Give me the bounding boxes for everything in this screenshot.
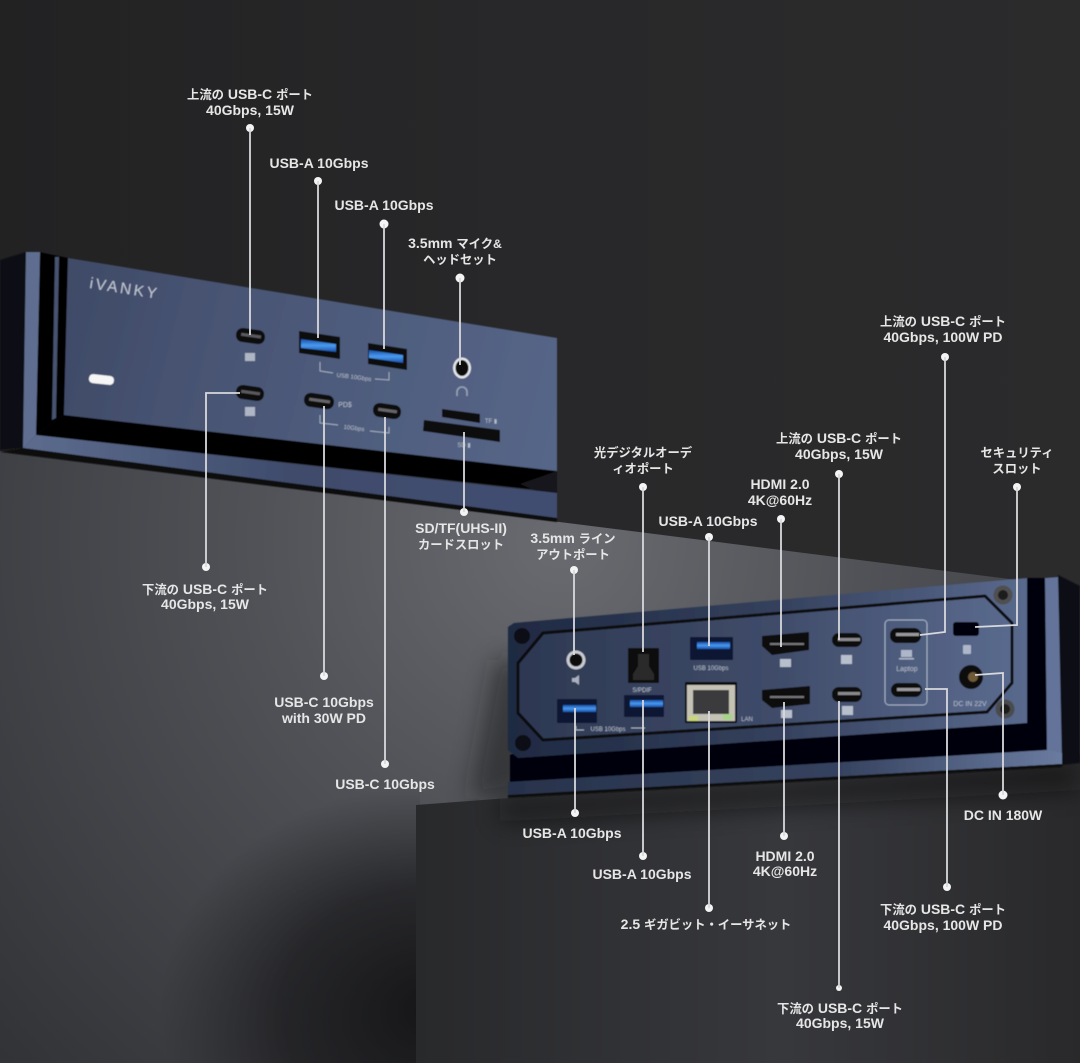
laptop ports group xyxy=(885,620,927,705)
downstream USB-C port xyxy=(891,683,922,697)
callout: mic headset: ヘッドセット xyxy=(423,253,497,267)
callout: DC IN: DC IN 180W xyxy=(964,807,1043,823)
DC IN 22V label: DC IN 22V xyxy=(953,701,987,708)
10Gbps bracket: 10Gbps xyxy=(343,425,365,433)
screw top right xyxy=(994,586,1012,604)
right dock body xyxy=(508,575,1080,798)
callout: ethernet: 2.5 ギガビット・イーサネット xyxy=(621,916,791,932)
3.5mm line-out jack xyxy=(566,650,586,670)
USB 10Gbps bracket xyxy=(320,362,389,383)
lower USB-C port xyxy=(235,384,265,402)
callout: optical audio: ィオポート xyxy=(612,461,674,476)
callout: upstream USB-C 100W: 上流の USB-C ポート xyxy=(880,313,1006,329)
icon: monitor upper xyxy=(245,353,255,361)
TF card slot xyxy=(442,409,497,425)
screw top left xyxy=(514,628,530,644)
USB-A port 2 xyxy=(368,343,407,370)
callout: HDMI bottom xyxy=(753,702,817,879)
optical S/PDIF port xyxy=(628,648,659,694)
callout: upstream USB-C rear: 40Gbps, 15W xyxy=(795,446,884,462)
callout: USB-C 10Gbps xyxy=(335,417,435,792)
left dock body xyxy=(0,252,557,522)
background: grey lower wall xyxy=(0,451,1080,1063)
left dock: front view xyxy=(0,252,557,522)
callout: downstream USB-C front: 下流の USB-C ポート xyxy=(142,581,268,597)
callout: downstream USB-C 100W: 40Gbps, 100W PD xyxy=(883,917,1003,933)
USB-C port 3 xyxy=(372,402,402,420)
callout: USB-A rear top xyxy=(658,513,758,646)
USB 10Gbps bracket xyxy=(576,726,645,733)
LAN port: LAN xyxy=(741,717,753,723)
screw bottom right xyxy=(996,700,1014,718)
icon: lock xyxy=(963,645,971,654)
callout: HDMI top xyxy=(748,476,812,647)
callout: HDMI top: HDMI 2.0 xyxy=(750,476,810,492)
background: front pedestal block xyxy=(416,755,1080,1063)
callout: downstream USB-C rear: 下流の USB-C ポート xyxy=(777,1000,903,1016)
security slot xyxy=(953,622,979,636)
callout: USB-A rear middle xyxy=(592,700,692,882)
callout: SD/TF slot: SD/TF(UHS-II) xyxy=(415,520,507,536)
callout: optical audio xyxy=(594,445,693,652)
callout: HDMI bottom: 4K@60Hz xyxy=(753,863,817,879)
callout: USB-A front 2 xyxy=(334,197,434,349)
audio jack xyxy=(453,358,471,378)
callout: downstream USB-C rear xyxy=(777,701,903,1031)
DC input xyxy=(959,665,983,689)
callout: USB-A rear left xyxy=(522,708,622,841)
callout: DC IN xyxy=(964,673,1043,823)
callout: USB-C 30W PD xyxy=(274,406,374,726)
USB-A top port: USB 10Gbps xyxy=(693,666,729,672)
optical S/PDIF port: S/PDIF xyxy=(632,688,652,694)
icon: monitor lower xyxy=(245,407,255,416)
icon: speaker xyxy=(572,675,579,685)
icon: 4K top xyxy=(780,659,791,667)
TF card slot: TF ▮ xyxy=(485,419,497,425)
callout: security slot: スロット xyxy=(992,462,1042,476)
10Gbps bracket xyxy=(320,415,389,433)
callout: downstream USB-C front: 40Gbps, 15W xyxy=(161,596,250,612)
callout: upstream USB-C rear xyxy=(776,430,902,640)
SD card slot xyxy=(423,420,500,449)
callout: USB-A front 2: USB-A 10Gbps xyxy=(334,197,434,213)
callout: SD/TF slot: カードスロット xyxy=(418,538,504,552)
icon: 4K USB-C bottom xyxy=(842,706,853,715)
callout: mic headset: 3.5mm マイク& xyxy=(408,235,502,251)
callout: SD/TF slot xyxy=(415,432,507,552)
callout: line-out xyxy=(530,530,616,655)
callout: ethernet xyxy=(621,711,791,932)
LAN port xyxy=(685,682,753,723)
callout: USB-A front 1: USB-A 10Gbps xyxy=(269,155,369,171)
USB 10Gbps bracket: USB 10Gbps xyxy=(336,373,372,383)
callout: USB-C 30W PD: USB-C 10Gbps xyxy=(274,694,374,710)
indicator light xyxy=(89,374,114,385)
screw bottom left xyxy=(515,735,531,751)
right dock: rear view xyxy=(508,575,1080,798)
logo: iVANKY: iVANKY xyxy=(88,275,161,303)
USB-A middle port xyxy=(624,695,664,717)
USB 10Gbps bracket: USB 10Gbps xyxy=(590,727,626,733)
USB-C PD port xyxy=(303,392,335,410)
callout: downstream USB-C 100W: 下流の USB-C ポート xyxy=(880,901,1006,917)
HDMI bottom port xyxy=(762,686,810,708)
callout: upstream USB-C 100W xyxy=(880,313,1006,635)
USB-C top port xyxy=(832,633,862,647)
upper USB-C port xyxy=(235,327,266,345)
callout: upstream USB-C front xyxy=(187,86,313,335)
callout: downstream USB-C front xyxy=(142,393,268,612)
USB-A top port xyxy=(690,637,733,672)
callout: downstream USB-C rear: 40Gbps, 15W xyxy=(796,1015,885,1031)
callout: USB-A front 1 xyxy=(269,155,369,338)
USB-A left port xyxy=(557,699,597,723)
icon: laptop xyxy=(899,650,914,660)
Laptop label: Laptop xyxy=(896,666,918,673)
callout: optical audio: 光デジタルオーデ xyxy=(594,445,693,460)
icon: 4K USB-C top xyxy=(841,655,852,664)
callout: mic headset xyxy=(408,235,502,365)
callout: HDMI bottom: HDMI 2.0 xyxy=(755,848,815,864)
callout: upstream USB-C front: 40Gbps, 15W xyxy=(206,102,295,118)
callout: upstream USB-C front: 上流の USB-C ポート xyxy=(187,86,313,102)
callout: security slot: セキュリティ xyxy=(980,446,1054,460)
USB-A port 1 xyxy=(299,331,340,359)
callout: USB-A rear middle: USB-A 10Gbps xyxy=(592,866,692,882)
upstream USB-C port xyxy=(890,628,921,643)
callout: line-out: アウトポート xyxy=(536,547,610,562)
icon: 4K bottom xyxy=(781,710,792,718)
PD label: PD$ xyxy=(338,402,352,409)
callout: USB-A rear top: USB-A 10Gbps xyxy=(658,513,758,529)
callout: USB-C 30W PD: with 30W PD xyxy=(281,710,366,726)
callout: upstream USB-C rear: 上流の USB-C ポート xyxy=(776,430,902,446)
callout: HDMI top: 4K@60Hz xyxy=(748,492,812,508)
callout: upstream USB-C 100W: 40Gbps, 100W PD xyxy=(883,329,1003,345)
callout: downstream USB-C 100W xyxy=(880,689,1006,933)
icon: headphones xyxy=(457,387,467,396)
callout: security slot xyxy=(975,446,1054,627)
USB-C bottom port xyxy=(832,687,862,702)
callout: line-out: 3.5mm ライン xyxy=(530,530,616,546)
callout: USB-C 10Gbps: USB-C 10Gbps xyxy=(335,776,435,792)
SD card slot: SD ▮ xyxy=(457,443,471,449)
callout: USB-A rear left: USB-A 10Gbps xyxy=(522,825,622,841)
background: dark upper wall xyxy=(0,0,1080,640)
HDMI top port xyxy=(762,632,809,655)
